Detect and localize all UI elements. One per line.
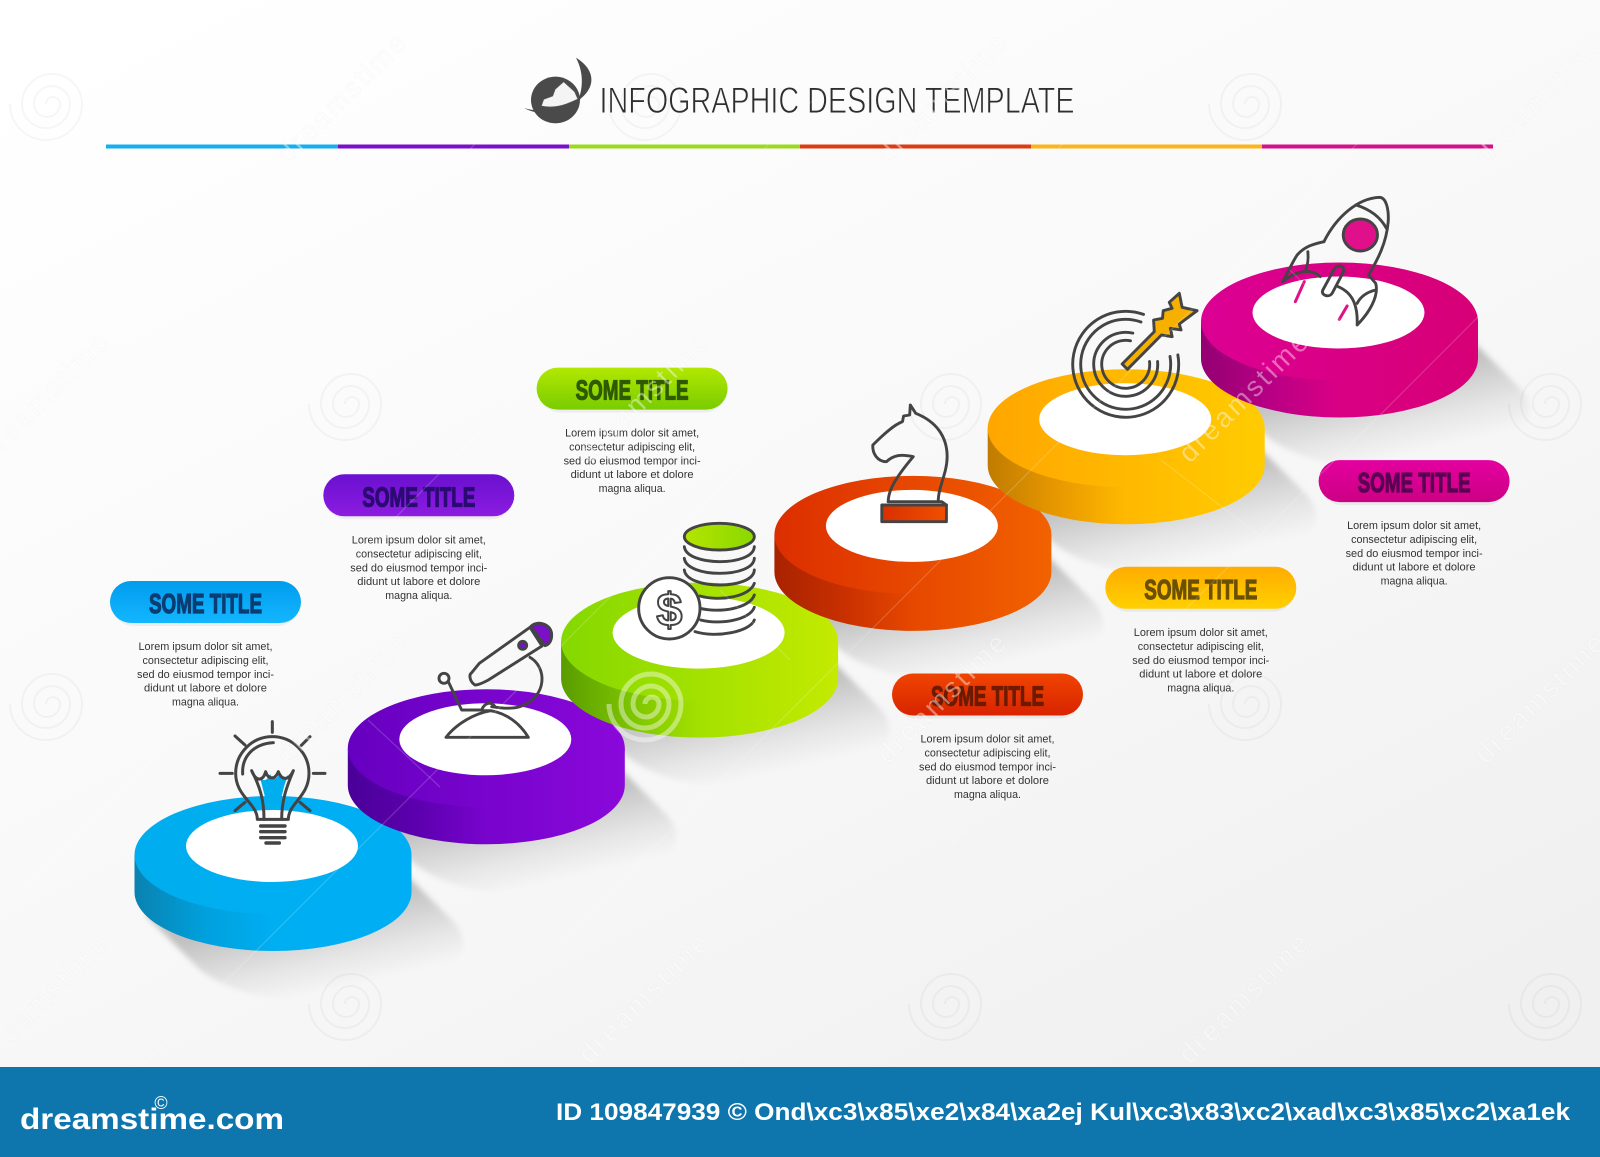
label 1: blue: Lorem ipsum dolor sit amet, [138,641,272,653]
label 5: yellow: Lorem ipsum dolor sit amet, [1134,627,1268,639]
icon: target with arrow [1064,293,1197,426]
label 2: purple: didunt ut labore et dolore [357,576,480,588]
label 1: blue: SOME TITLE [149,588,262,619]
label 1: blue: didunt ut labore et dolore [144,682,267,694]
label 3: green: Lorem ipsum dolor sit amet, [565,428,699,440]
label 2: purple: sed do eiusmod tempor inci- [350,562,488,574]
footer copyright mark: © [154,1093,168,1113]
label 6: magenta: didunt ut labore et dolore [1353,562,1476,574]
label 6: magenta: sed do eiusmod tempor inci- [1346,548,1483,560]
icon: microscope [439,623,552,737]
icon: rocket [1283,197,1388,325]
title: INFOGRAPHIC DESIGN TEMPLATE [600,80,1074,121]
label 5: yellow: SOME TITLE [1144,574,1257,605]
disc shadows [145,336,1529,1002]
logo icon [524,58,591,123]
label 1: blue: magna aliqua. [172,696,239,708]
label 1: blue: consectetur adipiscing elit, [142,655,268,667]
label 4: red: Lorem ipsum dolor sit amet, [920,734,1054,746]
icon: coins: $ [656,583,682,635]
label 5: yellow: didunt ut labore et dolore [1139,668,1262,680]
footer credit: ID 109847939 © Ond\xc3\x85\xe2\x84\xa2ej Kul\xc3\x83\xc2\xad\xc3\x85\xc2\xa1ek [556,1099,1571,1126]
disc 2: purple [348,689,625,844]
disc 1: blue [134,796,412,951]
watermark text and lines: dreamstime [1172,326,1314,468]
label 3: green: sed do eiusmod tempor inci- [564,456,701,468]
label 2: purple: SOME TITLE [362,481,475,512]
label 3: green: SOME TITLE [576,375,689,406]
label 4: red: SOME TITLE [931,680,1044,712]
label 1: blue [110,581,301,708]
label 2: purple: consectetur adipiscing elit, [356,548,482,560]
watermark text and lines: dreamstime [572,927,714,1069]
label 5: yellow: magna aliqua. [1167,682,1234,694]
label 6: magenta: consectetur adipiscing elit, [1351,534,1477,546]
label 4: red [892,674,1083,801]
icon: coins [639,523,754,639]
disc 6: magenta [1201,262,1478,418]
footer logo text: dreamstime.com [20,1103,284,1136]
watermark text and lines: dreamstime [572,326,714,468]
watermark text and lines: dreamstime [1172,927,1314,1069]
colored divider line [106,144,1493,148]
label 4: red: sed do eiusmod tempor inci- [919,762,1056,774]
label 2: purple [323,474,514,602]
footer bar [0,1067,1600,1157]
label 6: magenta: SOME TITLE [1358,467,1471,498]
disc 4: red [774,476,1051,631]
label 5: yellow [1105,567,1296,694]
label 3: green: magna aliqua. [599,483,666,495]
label 5: yellow: sed do eiusmod tempor inci- [1132,655,1270,667]
label 6: magenta: Lorem ipsum dolor sit amet, [1347,520,1481,532]
label 4: red: magna aliqua. [954,789,1021,801]
label 3: green [537,368,728,495]
watermark text and lines: dreamstime [270,27,412,169]
disc 3: green [561,583,838,738]
label 1: blue: sed do eiusmod tempor inci- [137,669,274,681]
label 3: green: consectetur adipiscing elit, [569,442,695,454]
watermark text and lines: dreamstime [270,627,412,769]
label 6: magenta: magna aliqua. [1381,576,1448,588]
watermark text and lines: dreamstime [870,627,1012,769]
watermark text and lines: dreamstime [870,27,1012,169]
icon: chess knight [873,405,947,522]
label 6: magenta [1319,460,1510,588]
label 2: purple: Lorem ipsum dolor sit amet, [352,534,486,546]
disc 5: yellow [988,369,1265,524]
icon: light bulb [220,722,325,843]
label 4: red: consectetur adipiscing elit, [924,748,1050,760]
label 4: red: didunt ut labore et dolore [926,775,1049,787]
label 3: green: didunt ut labore et dolore [571,469,694,481]
label 2: purple: magna aliqua. [385,590,452,602]
label 5: yellow: consectetur adipiscing elit, [1138,641,1264,653]
